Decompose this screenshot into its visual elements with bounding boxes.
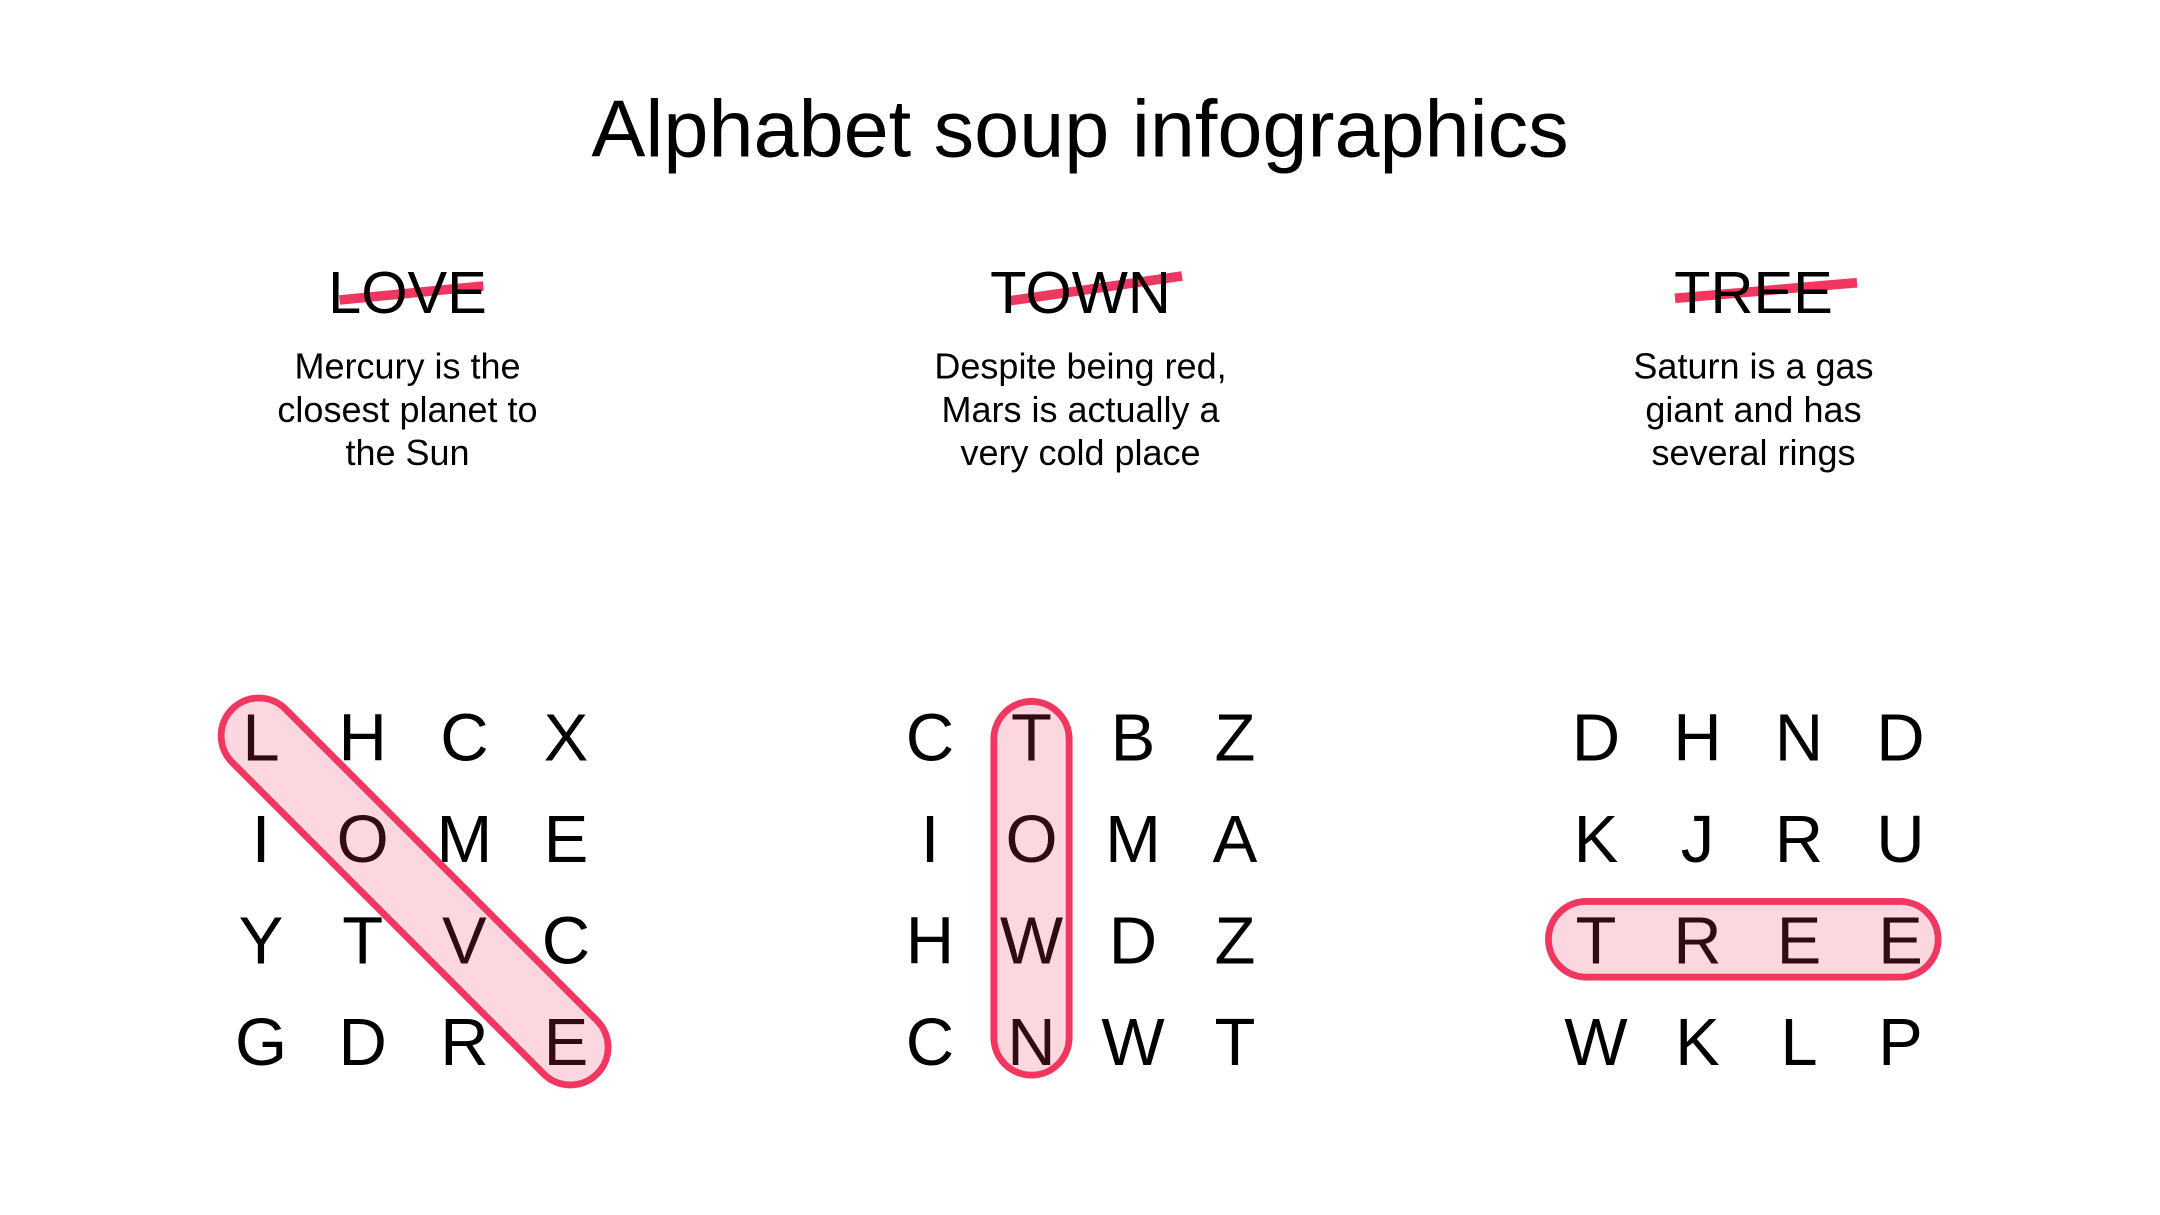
heading: TOWN: TOWN	[990, 259, 1171, 326]
text block: Saturn: Saturn is a gas	[1633, 346, 1874, 387]
panel: LOVE letter grid: G	[235, 1005, 287, 1080]
panel: LOVE letter grid: M	[436, 802, 492, 877]
heading: TREE: TREE	[1674, 259, 1833, 326]
panel: LOVE letter grid: R	[440, 1005, 489, 1080]
panel: LOVE letter grid: C	[542, 904, 590, 979]
panel: TOWN letter grid: D	[1109, 904, 1157, 979]
panel: LOVE clue	[277, 259, 538, 473]
panel: TREE letter grid: E	[1777, 904, 1821, 979]
panel: TOWN letter grid: B	[1111, 700, 1155, 775]
panel: LOVE letter grid: E	[544, 1005, 588, 1080]
panel: LOVE letter grid: V	[442, 904, 487, 979]
highlight: TREE horizontal	[1548, 901, 1938, 977]
panel: LOVE letter grid: I	[252, 802, 270, 877]
panel: TREE letter grid: R	[1673, 904, 1722, 979]
panel: TOWN letter grid: M	[1105, 802, 1161, 877]
panel: TREE letter grid: H	[1673, 700, 1722, 775]
panel: TREE letter grid: U	[1876, 802, 1925, 877]
text block: Saturn	[1633, 346, 1874, 473]
panel: LOVE letter grid: T	[342, 904, 383, 979]
panel: TREE letter grid: N	[1775, 700, 1823, 775]
panel: TOWN letter grid: W	[1101, 1005, 1165, 1080]
panel: LOVE letter grid: O	[337, 802, 389, 877]
text block: Mercury: Mercury is the	[294, 346, 521, 387]
panel: LOVE letter grid: C	[440, 700, 489, 775]
panel: TOWN letter grid: O	[1005, 802, 1058, 877]
panel: TOWN letter grid: H	[906, 904, 954, 979]
text block: Mars: Despite being red,	[934, 346, 1227, 387]
panel: LOVE letter grid	[206, 682, 624, 1101]
panel: TOWN letter grid: N	[1007, 1005, 1056, 1080]
panel: TREE letter grid: K	[1574, 802, 1618, 877]
text block: Mercury: closest planet to	[277, 389, 538, 430]
panel: LOVE letter grid: X	[544, 700, 588, 775]
text block: Saturn: several rings	[1651, 432, 1856, 473]
highlight: LOVE diagonal	[206, 682, 624, 1101]
panel: TOWN letter grid: C	[906, 1005, 954, 1080]
panel: TOWN letter grid	[906, 700, 1258, 1080]
text block: Mercury	[277, 346, 538, 473]
heading: LOVE: LOVE	[328, 259, 487, 326]
panel: LOVE letter grid: E	[544, 802, 588, 877]
panel: TREE letter grid: W	[1564, 1005, 1628, 1080]
panel: TOWN letter grid: T	[1215, 1005, 1255, 1080]
panel: TOWN letter grid: C	[906, 700, 954, 775]
panel: TOWN letter grid: W	[1000, 904, 1064, 979]
panel: TREE letter grid: K	[1675, 1005, 1720, 1080]
panel: TOWN letter grid: A	[1213, 802, 1258, 877]
panel: TOWN letter grid: Z	[1215, 700, 1255, 775]
panel: TREE letter grid: E	[1878, 904, 1923, 979]
panel: LOVE letter grid: H	[339, 700, 387, 775]
panel: TREE letter grid: T	[1576, 904, 1616, 979]
panel: TREE letter grid: L	[1780, 1005, 1818, 1080]
panel: TREE letter grid: R	[1775, 802, 1823, 877]
text block: Mars: very cold place	[960, 432, 1201, 473]
panel: TOWN letter grid: T	[1011, 700, 1052, 775]
panel: TREE clue	[1633, 259, 1874, 473]
panel: TREE letter grid: D	[1572, 700, 1620, 775]
panel: TOWN clue	[934, 259, 1227, 473]
strike line: TREE	[1675, 283, 1857, 298]
text block: Mars: Mars is actually a	[941, 389, 1221, 430]
panel: TOWN letter grid: Z	[1215, 904, 1255, 979]
text block: Saturn: giant and has	[1645, 389, 1862, 430]
text block: Mars	[934, 346, 1227, 473]
strike line: LOVE	[340, 286, 483, 300]
panel: TREE letter grid: J	[1681, 802, 1714, 877]
panel: LOVE letter grid: D	[339, 1005, 387, 1080]
panel: LOVE letter grid: Y	[239, 904, 283, 979]
highlight: TOWN vertical	[994, 701, 1069, 1075]
title: Alphabet soup infographics	[591, 85, 1569, 175]
strike line: TOWN	[1010, 276, 1182, 301]
text block: Mercury: the Sun	[345, 432, 470, 473]
panel: TREE letter grid	[1548, 700, 1938, 1080]
panel: TOWN letter grid: I	[921, 802, 939, 877]
panel: TREE letter grid: D	[1876, 700, 1925, 775]
panel: LOVE letter grid: L	[242, 700, 280, 775]
panel: TREE letter grid: P	[1878, 1005, 1923, 1080]
